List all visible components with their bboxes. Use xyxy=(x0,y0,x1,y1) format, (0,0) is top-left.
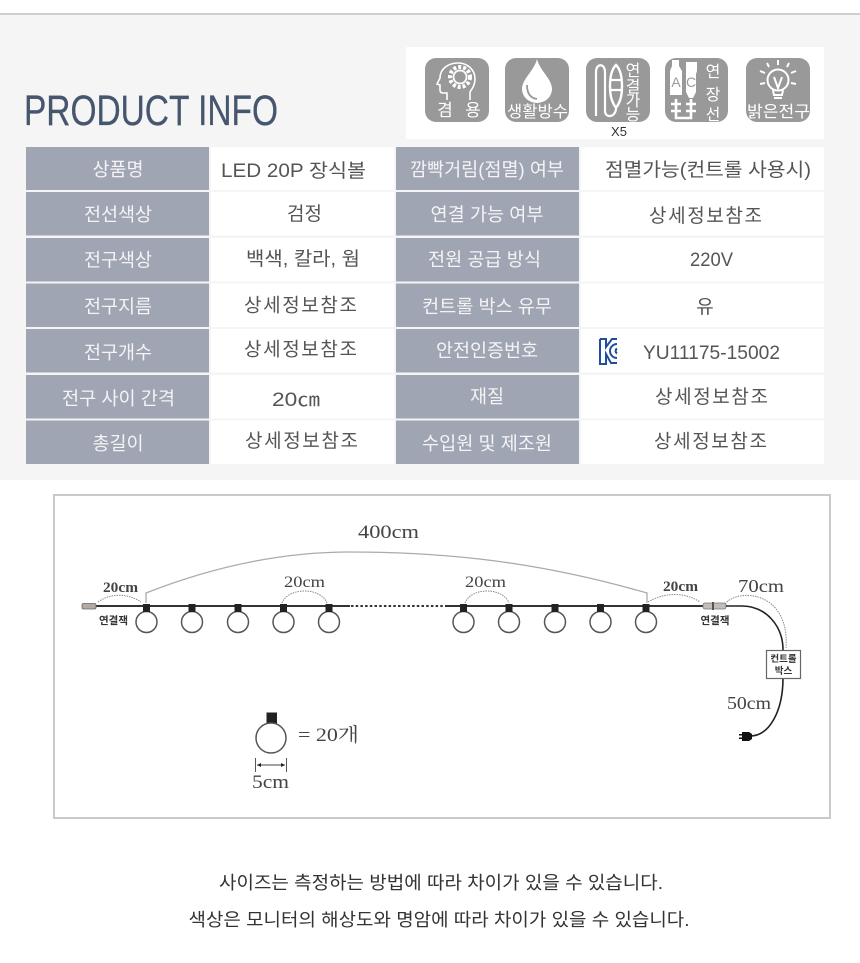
spacing arcs xyxy=(98,591,786,648)
icon: connectable: 가 xyxy=(626,92,641,110)
control box: 컨트롤 xyxy=(770,654,797,665)
right bulbs xyxy=(453,604,656,632)
icon: extension cord: C xyxy=(686,74,696,90)
left bulbs xyxy=(136,604,340,632)
bulb legend xyxy=(252,712,359,793)
left value column: 검정 xyxy=(287,203,322,225)
bulb legend: = 20개 xyxy=(298,724,359,746)
left header column: 전구지름 xyxy=(84,296,152,317)
icon: extension cord: 장 xyxy=(706,86,721,104)
right value column: YU11175-15002 xyxy=(643,343,780,364)
dimension labels: 20cm xyxy=(465,574,507,591)
icon: indoor and outdoor use xyxy=(425,58,489,122)
dimension labels: 70cm xyxy=(738,576,784,596)
dimension labels: 20cm xyxy=(284,574,326,591)
icon: bright bulb: 밝은전구 xyxy=(747,103,810,121)
right value column: 220V xyxy=(690,250,733,271)
left header column: 전선색상 xyxy=(84,204,152,225)
icon: extension cord xyxy=(665,58,728,124)
dimension labels: 20cm xyxy=(663,579,698,595)
left connector: 연결잭 xyxy=(99,614,128,627)
icon: connectable: 연 xyxy=(626,62,640,80)
title: PRODUCT INFO xyxy=(24,87,278,135)
icon: connectable: 능 xyxy=(626,106,640,124)
icon: indoor and outdoor use: 용 xyxy=(465,101,481,120)
left header column: 상품명 xyxy=(92,159,144,180)
left connector xyxy=(82,604,128,627)
notice text xyxy=(188,873,690,930)
left header column: 전구개수 xyxy=(84,342,152,363)
right header column: 컨트롤 박스 유무 xyxy=(422,296,552,317)
panel: feature icons xyxy=(406,47,824,139)
quantity label: X5 xyxy=(611,124,627,139)
right connector xyxy=(701,602,729,627)
dimension arc: 400cm xyxy=(146,522,647,603)
panel: size diagram xyxy=(54,495,830,818)
icon: indoor and outdoor use: 겸 xyxy=(437,101,453,120)
right value column: 상세정보참조 xyxy=(654,430,767,452)
right value column xyxy=(605,159,811,452)
left header column: 전구색상 xyxy=(84,250,152,270)
left value column: 상세정보참조 xyxy=(244,294,357,316)
icon: water drop xyxy=(505,58,569,122)
icon: extension cord: 연 xyxy=(706,63,720,81)
icon: KC mark xyxy=(600,339,617,364)
bulb legend: 5cm xyxy=(252,772,289,793)
right connector: 연결잭 xyxy=(701,614,729,627)
right value column: 상세정보참조 xyxy=(655,386,768,408)
control box: 박스 xyxy=(775,665,792,677)
left value column: 20㎝ xyxy=(272,390,320,411)
left value column: 상세정보참조 xyxy=(245,430,358,452)
dimension arc: 400cm: 400cm xyxy=(358,522,419,543)
string light cable xyxy=(95,605,705,607)
left header column: 총길이 xyxy=(92,433,144,454)
icon: extension cord: 선 xyxy=(706,106,720,124)
left value column: 백색, 칼라, 웜 xyxy=(246,248,360,270)
icon: connectable: 결 xyxy=(626,78,640,96)
left value column: 상세정보참조 xyxy=(244,338,357,360)
right header column: 깜빡거림(점멸) 여부 xyxy=(410,159,564,180)
left value column: LED 20P 장식볼 xyxy=(221,160,366,182)
notice text: 색상은 모니터의 해상도와 명암에 따라 차이가 있을 수 있습니다. xyxy=(188,910,690,930)
right value column: 점멸가능(컨트롤 사용시) xyxy=(605,159,811,181)
left header column xyxy=(62,159,175,454)
notice text: 사이즈는 측정하는 방법에 따라 차이가 있을 수 있습니다. xyxy=(219,873,663,893)
icon: connectable xyxy=(586,58,650,124)
icon: extension cord: A xyxy=(671,74,681,90)
right header column: 안전인증번호 xyxy=(436,340,538,361)
dimension labels: 20cm xyxy=(103,580,138,596)
icon: water drop: 생활방수 xyxy=(507,103,568,121)
right header column: 전원 공급 방식 xyxy=(428,249,541,270)
left header column: 전구 사이 간격 xyxy=(62,388,175,409)
icon: bright bulb xyxy=(746,58,810,122)
right header column: 수입원 및 제조원 xyxy=(422,433,552,454)
power cable and plug xyxy=(726,606,783,741)
right header column: 연결 가능 여부 xyxy=(430,204,544,225)
spec table xyxy=(26,147,824,464)
right header column xyxy=(410,159,564,454)
right value column: 유 xyxy=(696,297,714,318)
dimension labels: 50cm xyxy=(727,693,771,713)
right value column: 상세정보참조 xyxy=(649,205,762,227)
left value column xyxy=(221,160,366,452)
control box xyxy=(766,650,800,678)
dimension labels xyxy=(103,574,784,713)
right header column: 재질 xyxy=(470,386,504,407)
